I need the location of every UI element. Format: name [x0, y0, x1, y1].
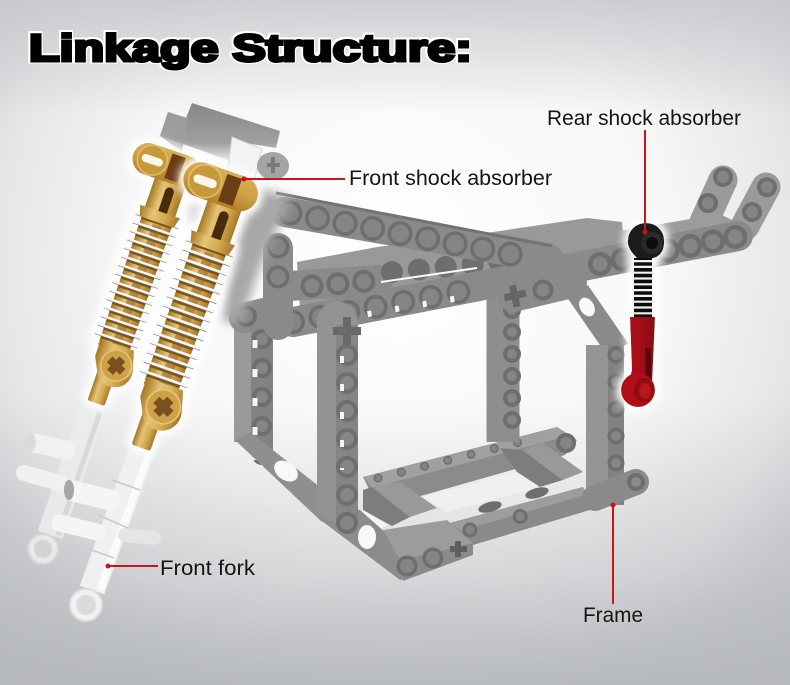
frame: base back rail: [363, 427, 577, 497]
black top ball: [628, 223, 664, 258]
callout: front shock absorber: [242, 166, 552, 190]
frame: cross piece: [504, 283, 572, 308]
title: Linkage Structure:: [29, 28, 472, 70]
callout: rear shock absorber: [547, 106, 741, 234]
callout: front fork: Front fork: [160, 556, 255, 580]
frame: base right rail: [450, 473, 645, 545]
frame: [235, 177, 767, 581]
frame: gusset and column 4: [576, 292, 618, 505]
frame: rear L beams: [555, 177, 767, 268]
frame: base interior opening: [423, 472, 540, 512]
front fork leg: [60, 440, 154, 621]
callout: front shock absorber: Front shock absorber: [349, 166, 552, 190]
frame: base front beam: [318, 500, 473, 581]
frame: top long beam: [276, 193, 552, 258]
front shock absorber: right: [94, 157, 263, 457]
frame: column 1: [235, 310, 330, 522]
frame: base cross members: [358, 443, 583, 531]
callout: rear shock absorber: Rear shock absorber: [547, 106, 741, 130]
spring and rod: [634, 258, 652, 320]
steering column (faded grey): [222, 188, 292, 325]
callout: front fork: [106, 556, 255, 580]
front shock absorber: left: [53, 139, 205, 411]
frame: back middle beam: [290, 218, 625, 310]
frame: left vertical connector: [235, 247, 278, 327]
front fork (transparent white): [24, 412, 154, 621]
callout: frame: [583, 502, 643, 627]
rear fork leg: [24, 412, 100, 564]
top clamp (grey, behind shocks): [160, 103, 289, 225]
frame: column 3: [503, 298, 512, 442]
rear shock absorber: [621, 223, 664, 407]
frame: front long beam: [293, 236, 740, 322]
red lower body: [621, 317, 655, 407]
callout: frame: Frame: [583, 603, 643, 627]
frame: column 2: [317, 302, 361, 528]
